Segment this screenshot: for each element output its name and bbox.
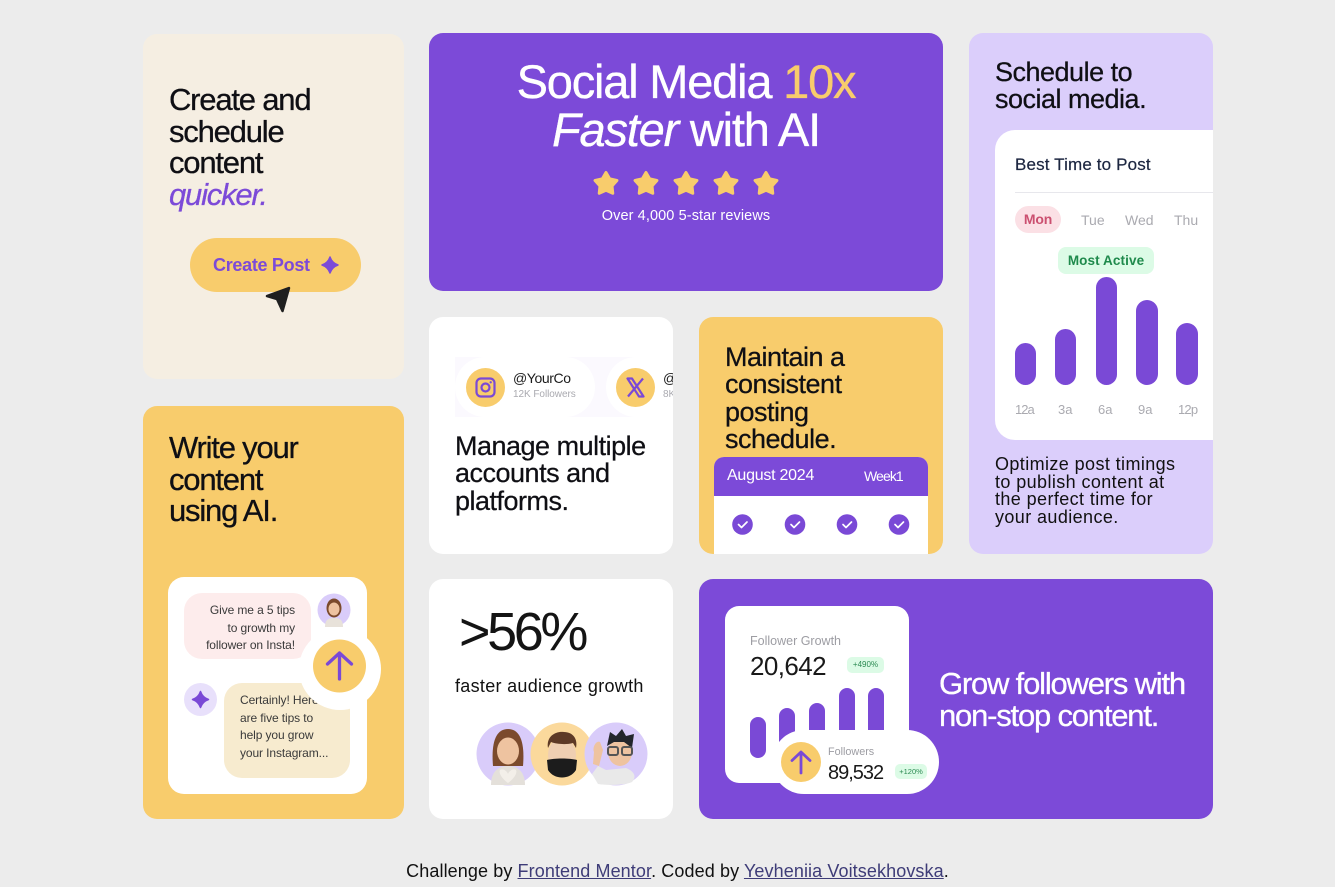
growth badge <box>847 657 884 673</box>
selected day: Mon <box>1015 206 1061 233</box>
followers pill <box>772 730 939 794</box>
calendar header <box>714 457 928 496</box>
growth badge <box>895 764 927 779</box>
account pill: instagram <box>455 357 595 417</box>
avatar group <box>476 722 648 786</box>
bar chart <box>1015 277 1198 385</box>
heading: write your content using AI <box>169 430 298 528</box>
button label: Create Post <box>213 255 310 275</box>
user chat bubble: to growth my <box>228 620 295 634</box>
heading: create and schedule content quicker <box>169 82 310 212</box>
week: Week1 <box>864 468 903 484</box>
stat: 56 percent: >56% <box>459 602 585 662</box>
growth card <box>725 606 909 783</box>
user chat bubble: Give me a 5 tips <box>210 603 295 617</box>
panel: hero <box>429 33 943 291</box>
bar: 9a <box>1136 300 1158 385</box>
heading: manage multiple accounts: Manage multiple <box>455 431 646 461</box>
AI chat bubble: your Instagram... <box>240 746 328 760</box>
star rating <box>594 170 778 195</box>
selected day: Mon: Mon <box>1024 211 1052 227</box>
bar 5 <box>868 688 884 758</box>
handle: @YourCo <box>513 370 571 386</box>
panel: write with AI <box>143 406 404 819</box>
heading: schedule to social media <box>995 57 1146 114</box>
heading: consistent posting schedule: consistent <box>725 369 842 399</box>
panel: schedule to social media <box>969 33 1213 554</box>
title: Social Media 10x <box>517 55 855 108</box>
body text <box>995 454 1175 527</box>
AI chat bubble: Certainly! Here <box>240 693 319 707</box>
heading: write your content using AI: Write your <box>169 430 298 465</box>
card label: Follower Growth <box>750 634 841 648</box>
bar: 12a <box>1015 343 1036 385</box>
growth badge: +120% <box>899 767 923 776</box>
heading: write your content using AI: using AI. <box>169 493 277 528</box>
panel: grow followers <box>699 579 1213 819</box>
most active tag <box>1058 247 1154 274</box>
bar: 3a <box>1055 329 1076 385</box>
heading: create and schedule content quicker: schedule <box>169 114 284 148</box>
heading: consistent posting schedule: posting <box>725 397 809 427</box>
heading: grow followers <box>939 666 1185 733</box>
icon: X logo <box>616 368 655 407</box>
panel: audience growth <box>429 579 673 819</box>
most active tag: Most Active <box>1068 253 1144 268</box>
card title: Best Time to Post <box>1015 155 1151 174</box>
stat caption: faster audience growth <box>455 676 644 696</box>
bar 4 <box>839 688 855 758</box>
icon: upload arrow button <box>301 638 381 710</box>
icon: instagram <box>466 368 505 407</box>
calendar <box>714 457 928 554</box>
heading: create and schedule content quicker: Create and <box>169 82 310 117</box>
bar 2 <box>779 708 795 758</box>
title <box>517 55 856 156</box>
avatar: man with glasses <box>584 722 648 786</box>
heading: schedule to social media: Schedule to <box>995 57 1132 87</box>
value: 89,532 <box>828 762 883 784</box>
axis label: 12a: 12a <box>1015 402 1034 417</box>
heading: manage multiple accounts: accounts and <box>455 458 610 488</box>
avatar: woman <box>476 722 540 786</box>
button: create post <box>190 238 361 292</box>
chat card <box>168 577 367 794</box>
followers: 12K Followers <box>513 389 576 400</box>
footer attribution: Challenge by Frontend Mentor. Coded by Yevheniia Voitsekhovska. <box>406 861 949 881</box>
month: August 2024 <box>727 467 814 484</box>
title: Faster with AI <box>552 103 820 156</box>
bar chart <box>750 688 884 758</box>
day: Wed: Wed <box>1125 212 1154 228</box>
axis label: 6a: 6a <box>1098 402 1112 417</box>
bar: 12p <box>1176 323 1198 385</box>
reviews caption: Over 4,000 5-star reviews <box>602 208 770 224</box>
value: 20,642 <box>750 651 826 681</box>
AI chat bubble <box>224 683 350 778</box>
axis label: 9a: 9a <box>1138 402 1152 417</box>
body text: the perfect time for <box>995 489 1153 509</box>
heading: manage multiple accounts: platforms. <box>455 486 569 516</box>
heading: consistent posting schedule: schedule. <box>725 424 836 454</box>
avatar: user <box>318 594 350 627</box>
label: Followers <box>828 746 874 758</box>
body text: Optimize post timings <box>995 454 1175 474</box>
bar 1 <box>750 717 766 758</box>
user chat bubble <box>184 593 311 659</box>
day: Tue: Tue <box>1081 212 1105 228</box>
heading: write your content using AI: content <box>169 462 262 496</box>
heading: create and schedule content quicker: content <box>169 145 262 180</box>
best time card <box>995 130 1213 440</box>
heading: consistent posting schedule <box>725 342 846 454</box>
growth badge: +490% <box>853 660 878 669</box>
heading: grow followers: non-stop content. <box>939 698 1158 732</box>
body text: to publish content at <box>995 472 1165 492</box>
heading: create and schedule content quicker: quicker. <box>169 176 267 212</box>
icon: AI sparkle avatar <box>184 683 217 716</box>
AI chat bubble: are five tips to <box>240 710 313 724</box>
icon: up arrow <box>781 742 821 782</box>
panel: create and schedule <box>143 34 404 379</box>
heading: schedule to social media: social media. <box>995 84 1146 114</box>
body text: your audience. <box>995 507 1119 527</box>
heading: consistent posting schedule: Maintain a <box>725 342 845 372</box>
heading: grow followers: Grow followers with <box>939 666 1185 701</box>
account pill: X <box>606 357 746 417</box>
heading: manage multiple accounts <box>455 431 646 516</box>
panel: consistent schedule <box>699 317 943 554</box>
AI chat bubble: help you grow <box>240 728 313 742</box>
avatar: man with mask <box>530 722 594 786</box>
icon: cursor arrow <box>266 286 290 312</box>
completed day checks <box>732 514 910 535</box>
account strip <box>455 357 673 417</box>
bar 3 <box>809 703 825 758</box>
axis label: 3a: 3a <box>1058 402 1072 417</box>
bar: 6a <box>1096 277 1117 385</box>
user chat bubble: follower on Insta! <box>206 638 295 652</box>
axis label: 12p: 12p <box>1178 402 1197 417</box>
panel: manage accounts <box>429 317 673 554</box>
day: Thu: Thu <box>1174 212 1198 228</box>
icon: sparkle <box>321 256 339 274</box>
